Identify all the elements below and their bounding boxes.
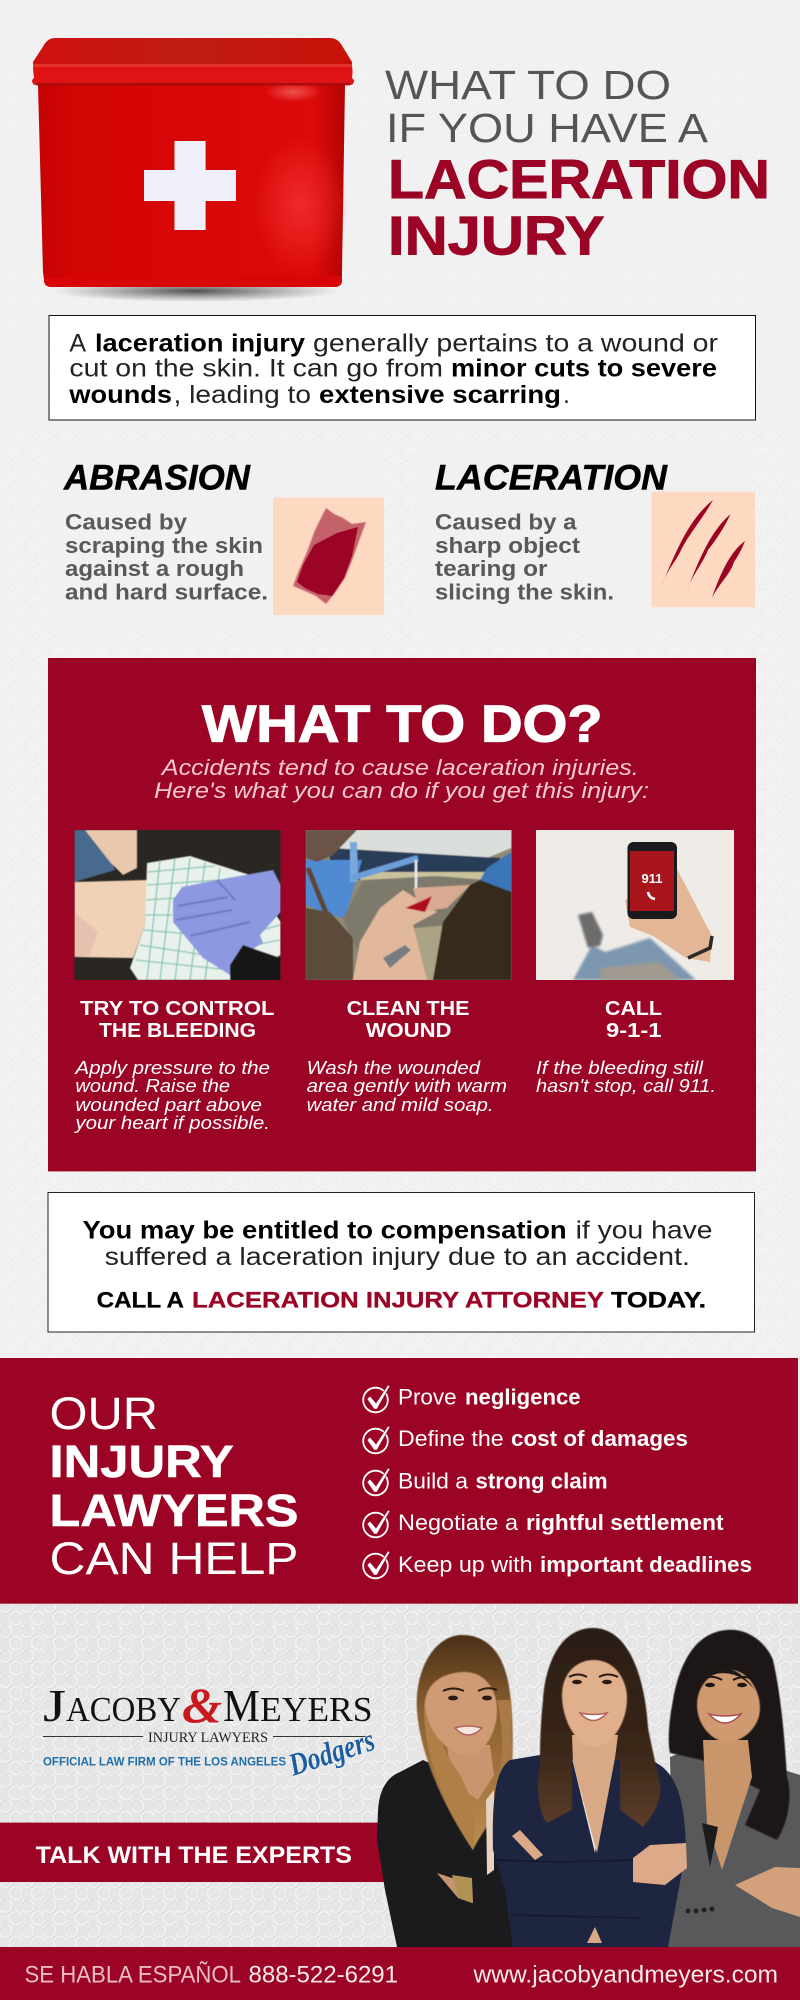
textured lower background xyxy=(0,1604,800,1947)
step 2: clean the wound: Wash the wounded xyxy=(307,1058,481,1078)
text: abrasion description: and hard surface. xyxy=(65,579,268,604)
panel: what to do xyxy=(48,658,756,1171)
step 1: try to control the bleeding: wound. Raise the xyxy=(75,1076,230,1096)
title: IF YOU HAVE A xyxy=(386,105,709,151)
intro text box: . xyxy=(563,381,570,409)
callout: compensation: You may be entitled to compensation xyxy=(82,1216,567,1244)
step 2: clean the wound: CLEAN THE xyxy=(347,998,469,1020)
title: WHAT TO DO xyxy=(385,62,671,108)
logo: Jacoby and Meyers: INJURY LAWYERS xyxy=(148,1730,268,1746)
step 2: clean the wound xyxy=(307,998,507,1115)
photo: phone calling 911 xyxy=(536,830,734,980)
footer: 888-522-6291 xyxy=(248,1962,398,1989)
lawyer: left xyxy=(377,1635,520,1947)
logo: Jacoby and Meyers: M xyxy=(223,1680,260,1731)
item: negotiate a rightful settlement xyxy=(363,1510,724,1537)
footer: www.jacobyandmeyers.com xyxy=(472,1962,778,1989)
photo: controlling the bleeding xyxy=(74,830,281,980)
text: abrasion description: scraping the skin xyxy=(65,533,263,558)
item: keep up with important deadlines: important deadlines xyxy=(540,1552,752,1577)
text: abrasion description: against a rough xyxy=(65,556,244,581)
photo: three lawyers xyxy=(377,1628,800,1947)
icon: Dodgers script: Dodgers xyxy=(283,1721,379,1783)
step 1: try to control the bleeding: wounded part above xyxy=(75,1095,262,1115)
step 1: try to control the bleeding: your heart if possible. xyxy=(73,1113,270,1133)
step 1: try to control the bleeding: THE BLEEDING xyxy=(99,1020,256,1042)
heading: our injury lawyers can help: CAN HELP xyxy=(50,1533,298,1584)
footer: SE HABLA ESPAÑOL xyxy=(24,1962,241,1989)
item: prove negligence: negligence xyxy=(465,1385,581,1410)
photo: cleaning the wound xyxy=(306,830,512,980)
item: keep up with important deadlines: Keep up with xyxy=(398,1552,533,1577)
heading: what to do: WHAT TO DO? xyxy=(202,696,602,754)
step 1: try to control the bleeding: TRY TO CONTROL xyxy=(80,998,274,1020)
step 2: clean the wound: WOUND xyxy=(366,1020,452,1042)
logo: Jacoby and Meyers: J xyxy=(43,1680,66,1731)
item: define the cost of damages: cost of damages xyxy=(511,1426,688,1451)
intro text box: A xyxy=(69,329,86,357)
title: INJURY xyxy=(388,205,605,267)
icon: red first aid box xyxy=(32,38,354,302)
banner: talk with the experts: TALK WITH THE EXPERTS xyxy=(36,1842,352,1869)
step 1: try to control the bleeding: Apply pressure to the xyxy=(74,1058,270,1078)
logo: Jacoby and Meyers: OFFICIAL LAW FIRM OF THE LOS ANGELES xyxy=(43,1756,286,1768)
callout: compensation: TODAY. xyxy=(611,1288,706,1313)
step 3: call 911: CALL xyxy=(605,998,662,1020)
item: build a strong claim: strong claim xyxy=(476,1468,608,1494)
panel: laceration xyxy=(419,441,755,636)
text: laceration description: tearing or xyxy=(435,556,548,581)
callout: compensation: suffered a laceration injury due to an accident. xyxy=(105,1243,690,1271)
subtitle: Here's what you can do if you get this injury: xyxy=(154,778,649,803)
intro text box: minor cuts to severe xyxy=(451,355,717,383)
title xyxy=(385,62,770,267)
step 3: call 911: If the bleeding still xyxy=(536,1058,704,1078)
item: build a strong claim xyxy=(363,1468,608,1495)
intro text box: , leading to xyxy=(174,381,311,409)
banner: talk with the experts xyxy=(0,1823,390,1882)
subtitle xyxy=(154,755,649,803)
text: laceration description: slicing the skin. xyxy=(435,579,614,604)
item: prove negligence: Prove xyxy=(398,1385,457,1410)
intro text box xyxy=(49,316,756,420)
photo: phone calling 911: 911 xyxy=(642,871,662,886)
logo: Jacoby and Meyers xyxy=(43,1677,379,1783)
step 3: call 911: hasn't stop, call 911. xyxy=(536,1076,716,1096)
text: laceration description: sharp object xyxy=(435,533,581,558)
callout: compensation: CALL A xyxy=(97,1288,184,1313)
icon: scratch marks xyxy=(652,492,755,607)
step 3: call 911 xyxy=(536,998,716,1096)
item: negotiate a rightful settlement: Negotiate a xyxy=(398,1510,519,1535)
heading: our injury lawyers can help: INJURY xyxy=(50,1436,234,1487)
text: abrasion description: Caused by xyxy=(65,510,188,534)
item: define the cost of damages xyxy=(363,1426,688,1453)
icon: abrasion smear xyxy=(273,498,384,615)
logo: Jacoby and Meyers: ACOBY xyxy=(66,1690,181,1729)
item: prove negligence xyxy=(363,1385,581,1412)
footer xyxy=(0,1947,800,2000)
step 2: clean the wound: water and mild soap. xyxy=(307,1095,494,1115)
intro text box: cut on the skin. It can go from xyxy=(69,355,443,383)
item: negotiate a rightful settlement: rightful settlement xyxy=(526,1510,724,1535)
callout: compensation xyxy=(48,1192,754,1332)
lawyer: right xyxy=(667,1630,800,1947)
panel: our injury lawyers can help xyxy=(0,1358,798,1604)
item: build a strong claim: Build a xyxy=(398,1468,469,1494)
icon: white cross xyxy=(144,141,236,230)
text: laceration description: Caused by a xyxy=(435,510,577,534)
callout: compensation: if you have xyxy=(576,1216,712,1244)
intro text box: extensive scarring xyxy=(319,381,561,409)
heading: abrasion: ABRASION xyxy=(63,458,251,498)
panel: abrasion xyxy=(48,441,384,636)
intro text box: generally pertains to a wound or xyxy=(313,329,718,357)
checklist xyxy=(363,1385,752,1578)
subtitle: Accidents tend to cause laceration injuries. xyxy=(160,755,639,780)
item: define the cost of damages: Define the xyxy=(398,1426,504,1451)
heading: our injury lawyers can help: OUR xyxy=(50,1388,158,1439)
intro text box: laceration injury xyxy=(95,329,305,357)
item: keep up with important deadlines xyxy=(363,1551,752,1578)
text: abrasion description xyxy=(65,510,268,604)
logo: Jacoby and Meyers: & xyxy=(182,1677,222,1733)
heading: our injury lawyers can help: LAWYERS xyxy=(50,1485,298,1536)
heading: laceration: LACERATION xyxy=(435,458,668,498)
intro text box: wounds xyxy=(68,381,172,409)
step 2: clean the wound: area gently with warm xyxy=(307,1076,507,1096)
title: LACERATION xyxy=(388,148,770,210)
step 1: try to control the bleeding xyxy=(73,998,274,1133)
heading: our injury lawyers can help xyxy=(50,1388,298,1584)
step 3: call 911: 9-1-1 xyxy=(606,1020,662,1042)
lawyer: center xyxy=(493,1628,687,1947)
text: laceration description xyxy=(435,510,614,604)
callout: compensation: LACERATION INJURY ATTORNEY xyxy=(192,1288,604,1313)
logo: Jacoby and Meyers: EYERS xyxy=(260,1690,372,1729)
